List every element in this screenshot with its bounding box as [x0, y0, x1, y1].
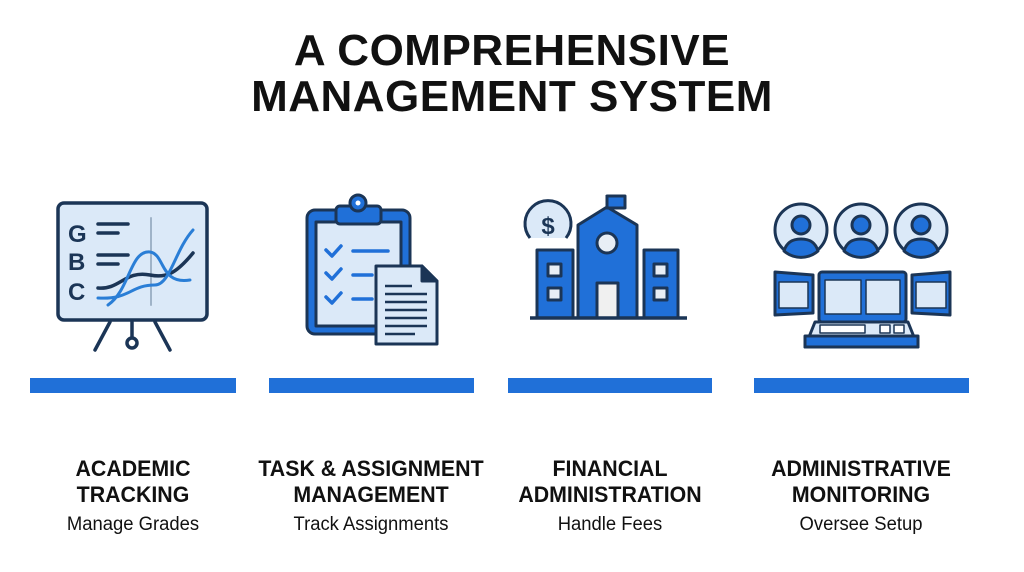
icon: admin monitoring [775, 204, 950, 347]
icon: grades board: C [68, 279, 85, 306]
icon: grades board: G [68, 221, 87, 248]
text: academic tracking: TRACKING [77, 482, 189, 507]
icon: school finance: $ [541, 213, 555, 240]
text: financial: ADMINISTRATION [518, 482, 702, 507]
text: admin monitoring: MONITORING [792, 482, 930, 507]
bar 1 [30, 378, 236, 393]
text: task management: Track Assignments [293, 514, 448, 535]
text: task management [258, 456, 484, 535]
icon: school finance [525, 195, 687, 318]
text: academic tracking: ACADEMIC [75, 456, 191, 481]
text: admin monitoring: ADMINISTRATIVE [771, 456, 951, 481]
icon: grades board [58, 203, 207, 350]
title [251, 26, 773, 121]
text: financial [518, 456, 702, 535]
title: MANAGEMENT SYSTEM [251, 72, 773, 121]
text: academic tracking [67, 456, 199, 535]
text: admin monitoring: Oversee Setup [800, 514, 922, 535]
text: financial: FINANCIAL [552, 456, 667, 481]
text: task management: TASK & ASSIGNMENT [258, 456, 484, 481]
text: task management: MANAGEMENT [293, 482, 449, 507]
text: admin monitoring [771, 456, 951, 535]
text: academic tracking: Manage Grades [67, 514, 199, 535]
bar 3 [508, 378, 712, 393]
title: A COMPREHENSIVE [294, 26, 730, 75]
bar 2 [269, 378, 474, 393]
icon: clipboard [307, 195, 437, 344]
bar 4 [754, 378, 969, 393]
text: financial: Handle Fees [558, 514, 662, 535]
icon: grades board: B [68, 249, 85, 276]
